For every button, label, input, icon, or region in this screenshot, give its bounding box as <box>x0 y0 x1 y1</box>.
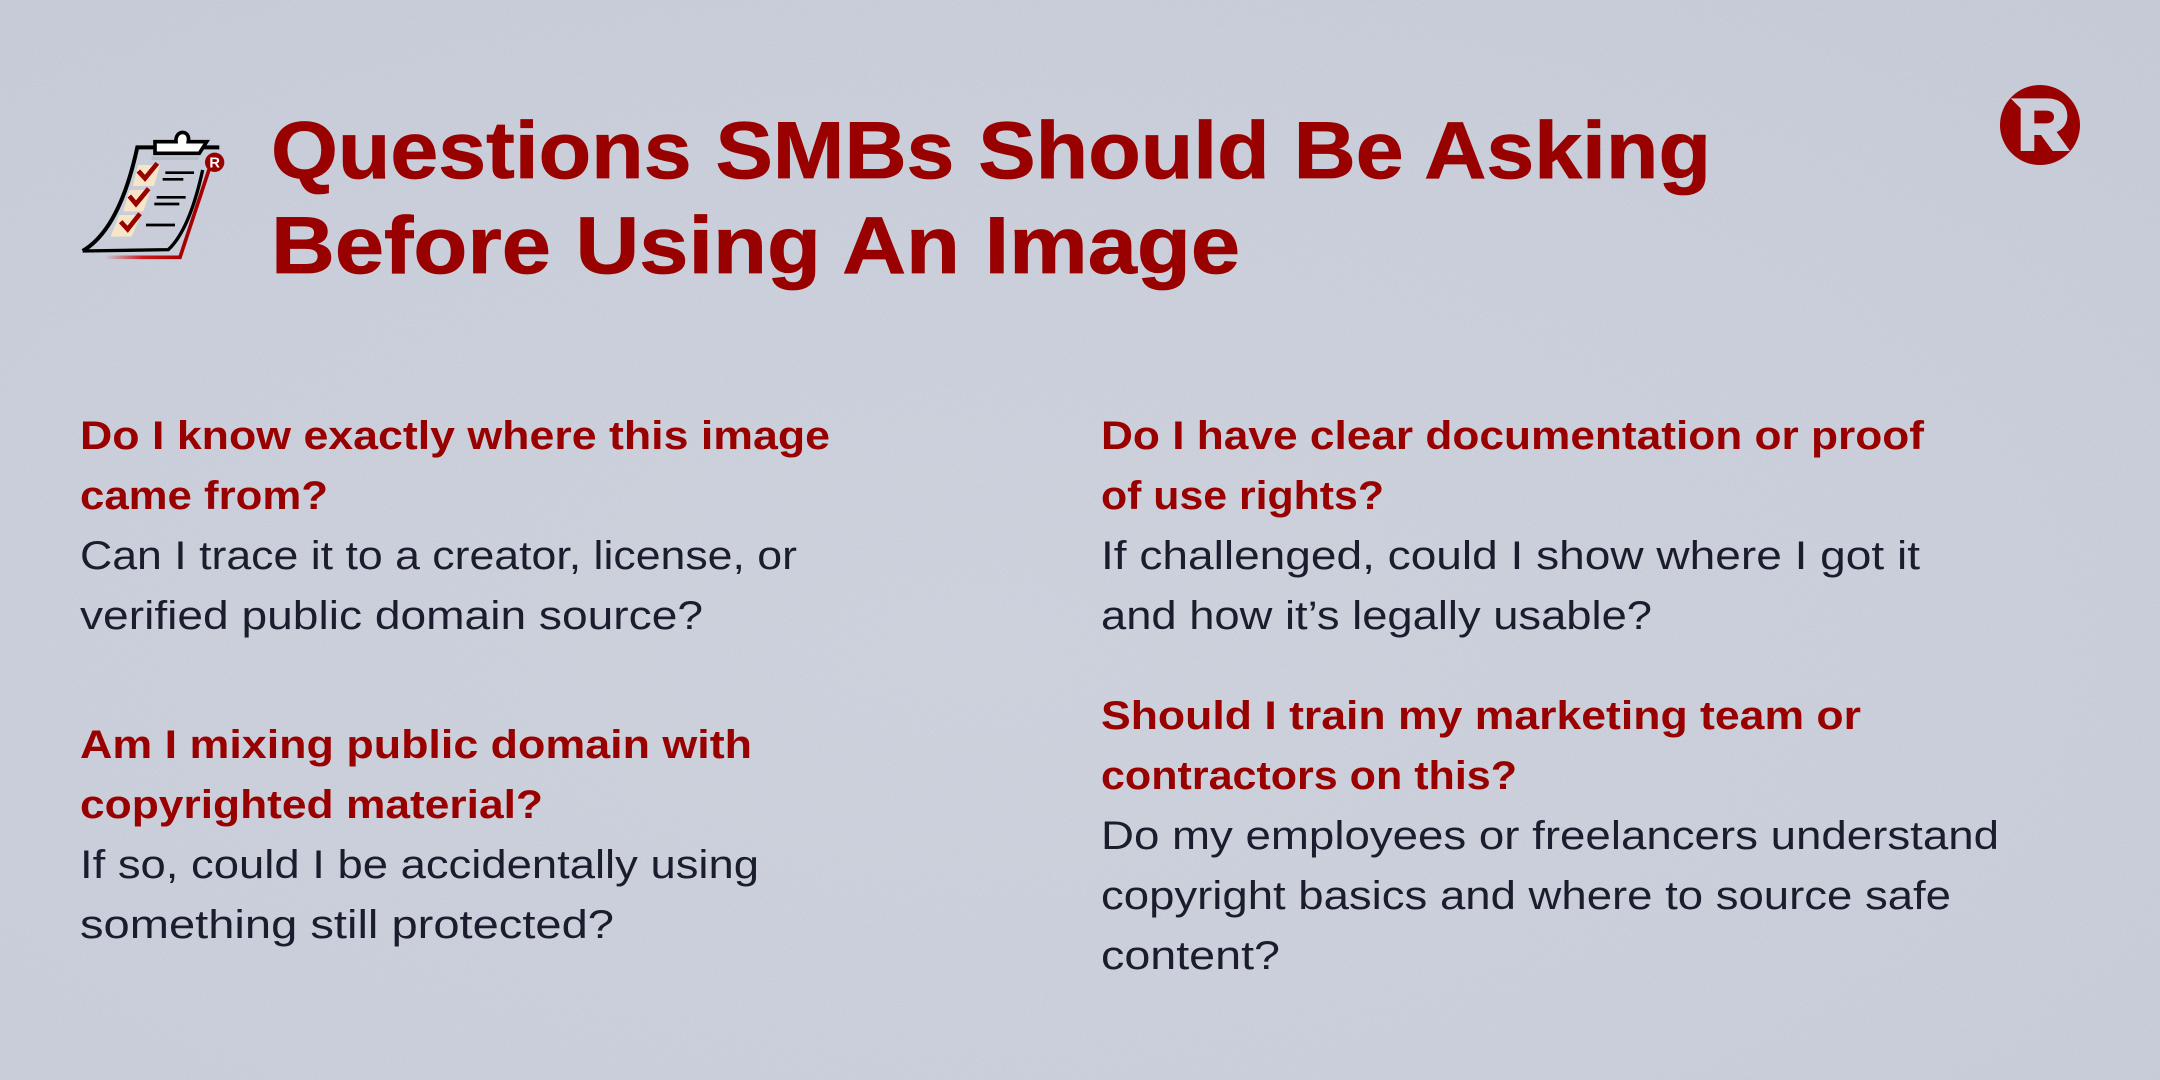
question block: documentation <box>1101 414 1925 638</box>
question block: mixing public domain: something still protected? <box>80 903 614 947</box>
question block: documentation: and how it’s legally usable? <box>1101 594 1652 638</box>
question block: training <box>1101 694 1999 978</box>
icon: clipboard checklist: R <box>209 155 220 171</box>
question block: mixing public domain: copyrighted material? <box>80 783 543 827</box>
question block: mixing public domain: If so, could I be accidentally using <box>80 843 759 887</box>
question block: image origin: came from? <box>80 474 328 518</box>
question block: image origin: Can I trace it to a creator, license, or <box>80 534 797 578</box>
question block: training: content? <box>1101 934 1280 978</box>
question block: documentation: If challenged, could I show where I got it <box>1101 534 1920 578</box>
title: Questions SMBs Should Be Asking <box>271 106 1711 196</box>
title: Before Using An Image <box>271 201 1240 291</box>
question block: training: contractors on this? <box>1101 754 1517 798</box>
question block: training: Should I train my marketing team or <box>1101 694 1861 738</box>
question block: mixing public domain: Am I mixing public domain with <box>80 723 752 767</box>
icon: clipboard checklist <box>83 132 224 257</box>
title <box>271 106 1711 291</box>
question block: mixing public domain <box>80 723 759 947</box>
question block: training: Do my employees or freelancers understand <box>1101 814 1999 858</box>
question block: documentation: Do I have clear documentation or proof <box>1101 414 1925 458</box>
question block: documentation: of use rights? <box>1101 474 1384 518</box>
logo: R in red circle <box>2000 85 2080 165</box>
question block: image origin: Do I know exactly where this image <box>80 414 830 458</box>
question block: image origin <box>80 414 830 638</box>
question block: image origin: verified public domain source? <box>80 594 703 638</box>
question block: training: copyright basics and where to source safe <box>1101 874 1951 918</box>
